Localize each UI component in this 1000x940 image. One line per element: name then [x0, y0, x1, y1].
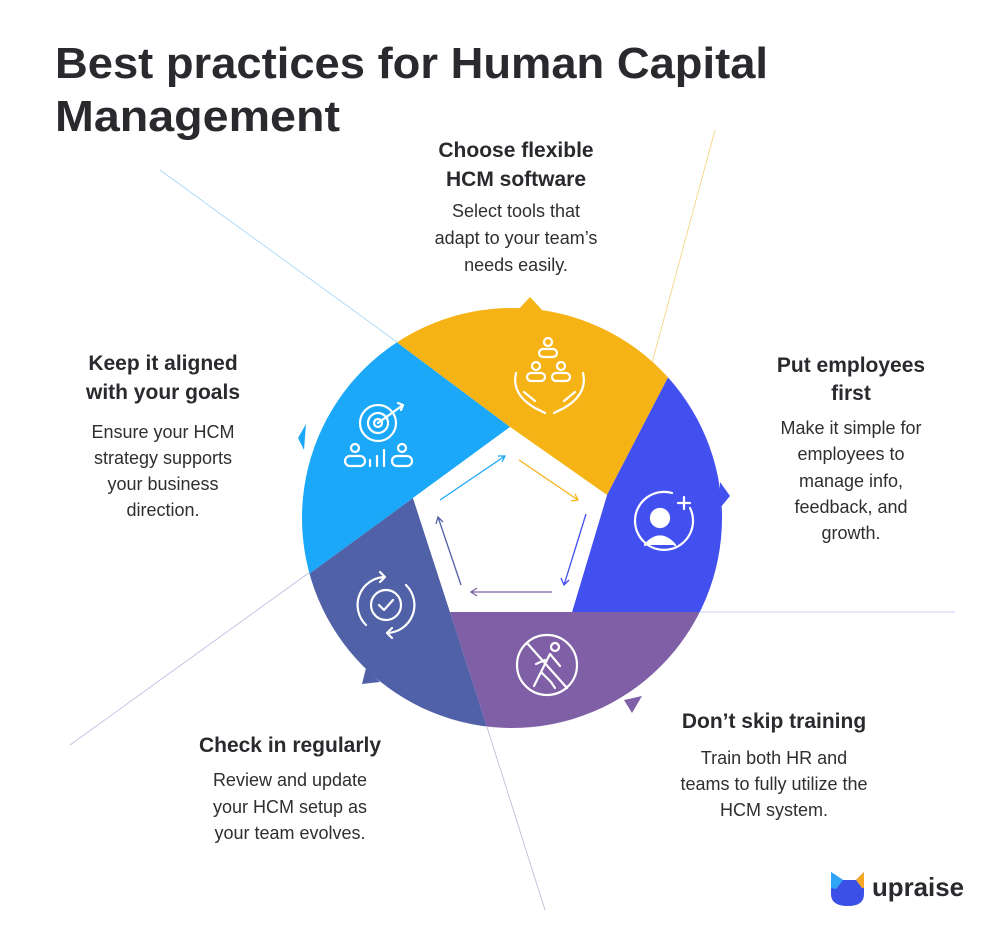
notches: [518, 297, 542, 310]
text: put employees first: growth.: [821, 523, 881, 543]
segment: royal blue: [572, 378, 722, 612]
text: put employees first: manage info,: [799, 471, 903, 491]
center pentagon: [413, 427, 607, 612]
text: dont skip training: HCM system.: [720, 800, 828, 820]
segment: light blue: [302, 342, 510, 574]
logo: upraise: [831, 872, 964, 906]
icon: no walking: [517, 635, 577, 695]
text: choose flexible: [435, 139, 597, 275]
text: put employees first: Put employees: [777, 354, 925, 377]
icon: refresh check: [358, 572, 414, 638]
text: choose flexible: HCM software: [446, 168, 586, 191]
text: keep aligned: your business: [107, 474, 219, 494]
text: put employees first: employees to: [797, 444, 905, 464]
text: dont skip training: [680, 710, 868, 820]
text: check in regularly: Review and update: [213, 770, 367, 790]
text: check in regularly: Check in regularly: [199, 734, 381, 757]
pentagon wheel: [298, 297, 730, 728]
segment: purple: [450, 612, 700, 728]
text: choose flexible: adapt to your team’s: [435, 228, 597, 248]
text: check in regularly: [199, 734, 381, 843]
text: check in regularly: your team evolves.: [214, 823, 366, 843]
icon: gear target: [345, 403, 412, 466]
text: keep aligned: [85, 352, 240, 520]
segment: slate: [310, 498, 487, 726]
text: dont skip training: Don’t skip training: [682, 710, 866, 733]
text: put employees first: Make it simple for: [780, 418, 922, 438]
text: choose flexible: Select tools that: [452, 201, 580, 221]
text: keep aligned: with your goals: [85, 381, 240, 404]
text: dont skip training: teams to fully utilize the: [680, 774, 868, 794]
title: Best practices for Human Capital: [55, 39, 768, 88]
text: put employees first: [777, 354, 925, 543]
text: put employees first: first: [831, 382, 871, 405]
text: choose flexible: Choose flexible: [438, 139, 594, 162]
title: [55, 39, 768, 141]
text: put employees first: feedback, and: [794, 497, 908, 517]
text: choose flexible: needs easily.: [464, 255, 568, 275]
text: keep aligned: direction.: [126, 500, 200, 520]
text: keep aligned: Keep it aligned: [88, 352, 238, 375]
thin guide lines: [70, 130, 955, 910]
cycle arrows: [436, 456, 586, 596]
text: keep aligned: strategy supports: [94, 448, 232, 468]
icon: hands with team: [515, 338, 584, 413]
title: Management: [55, 92, 340, 141]
text: check in regularly: your HCM setup as: [213, 797, 367, 817]
icon: add user: [635, 492, 693, 550]
logo: upraise: upraise: [872, 872, 964, 902]
text: dont skip training: Train both HR and: [701, 748, 847, 768]
text: keep aligned: Ensure your HCM: [91, 422, 235, 442]
segment: yellow: [396, 308, 668, 495]
